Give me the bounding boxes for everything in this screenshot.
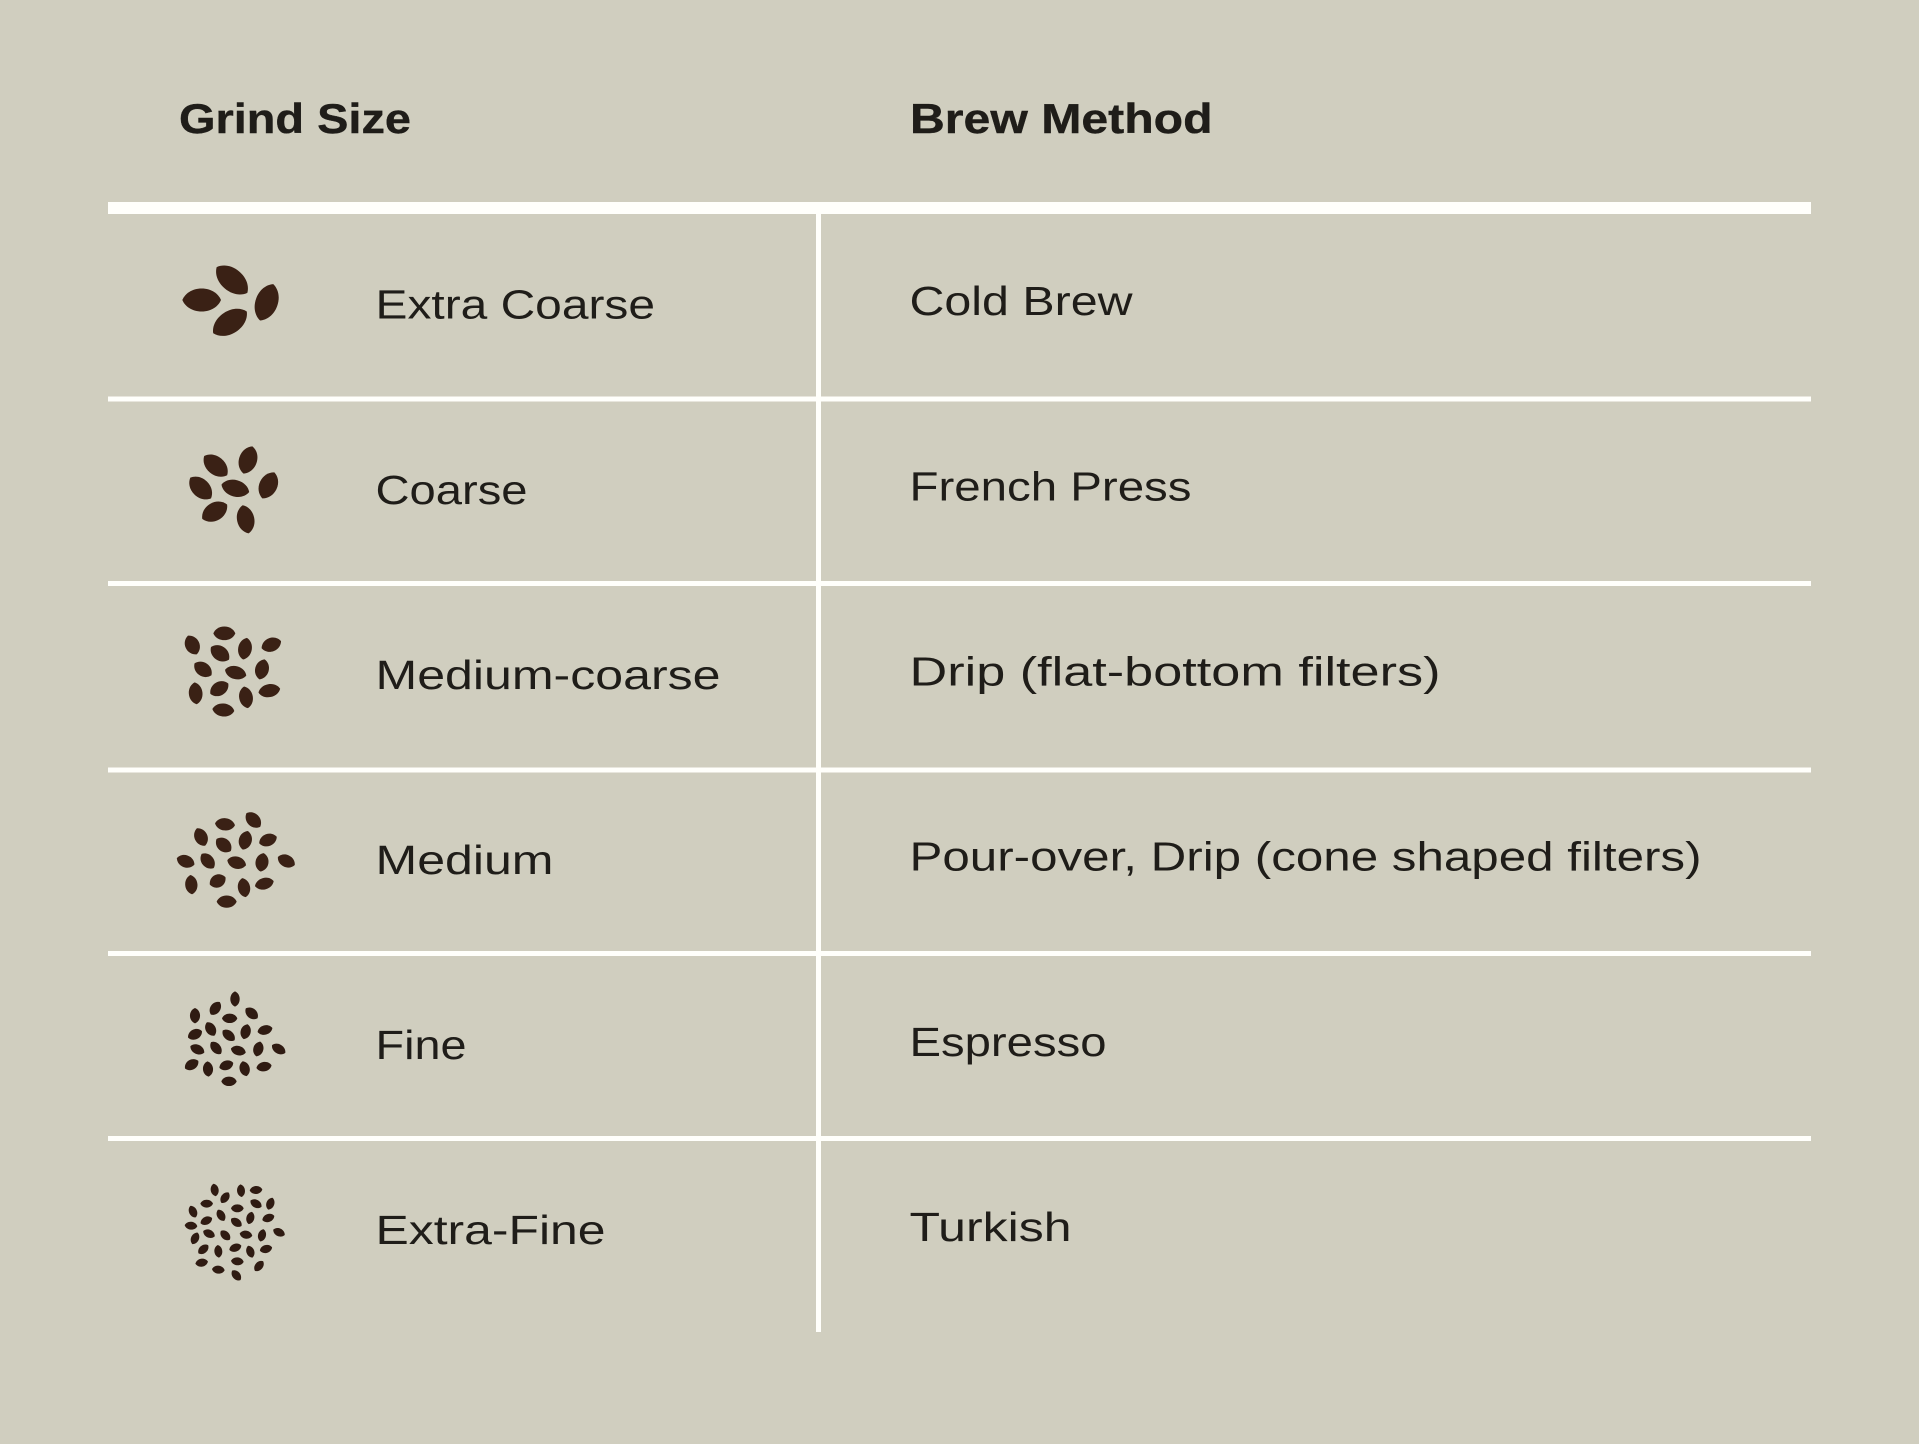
row: Fine / Espresso: [183, 991, 1107, 1086]
row: Extra-Fine / Turkish: [184, 1183, 1071, 1283]
label: Medium: Medium: [376, 837, 554, 883]
icon: coarse grind: [184, 444, 283, 535]
label: Espresso: Espresso: [910, 1019, 1106, 1065]
icon: medium grind: [175, 809, 297, 908]
label: Fine: Fine: [376, 1022, 466, 1068]
heading: Grind Size: Grind Size: [179, 95, 411, 142]
icon: extra coarse grind: [182, 259, 284, 343]
label: French Press: French Press: [910, 464, 1192, 510]
heading: Brew Method: Brew Method: [910, 95, 1212, 142]
icon: fine grind: [183, 991, 288, 1086]
row: Extra Coarse / Cold Brew: [182, 259, 1133, 343]
label: Coarse: Coarse: [376, 467, 528, 513]
label: Turkish: Turkish: [910, 1204, 1072, 1250]
label: Drip (flat-bottom filters): Drip (flat-bottom filters): [910, 649, 1440, 695]
label: Cold Brew: Cold Brew: [910, 278, 1133, 324]
label: Extra-Fine: Extra-Fine: [376, 1207, 606, 1253]
icon: extra-fine grind: [184, 1183, 286, 1283]
label: Medium-coarse: Medium-coarse: [376, 652, 720, 698]
icon: medium-coarse grind: [181, 626, 283, 717]
row: Medium / Pour-over: [175, 809, 1702, 908]
label: Pour-over, Drip (cone shaped filters): Pour-over, Drip (cone shaped filters): [910, 834, 1702, 880]
table grid lines: [108, 202, 1811, 1332]
row: Medium-coarse / Drip: [181, 626, 1440, 717]
row: Coarse / French Press: [184, 444, 1191, 535]
label: Extra Coarse: Extra Coarse: [376, 282, 655, 328]
